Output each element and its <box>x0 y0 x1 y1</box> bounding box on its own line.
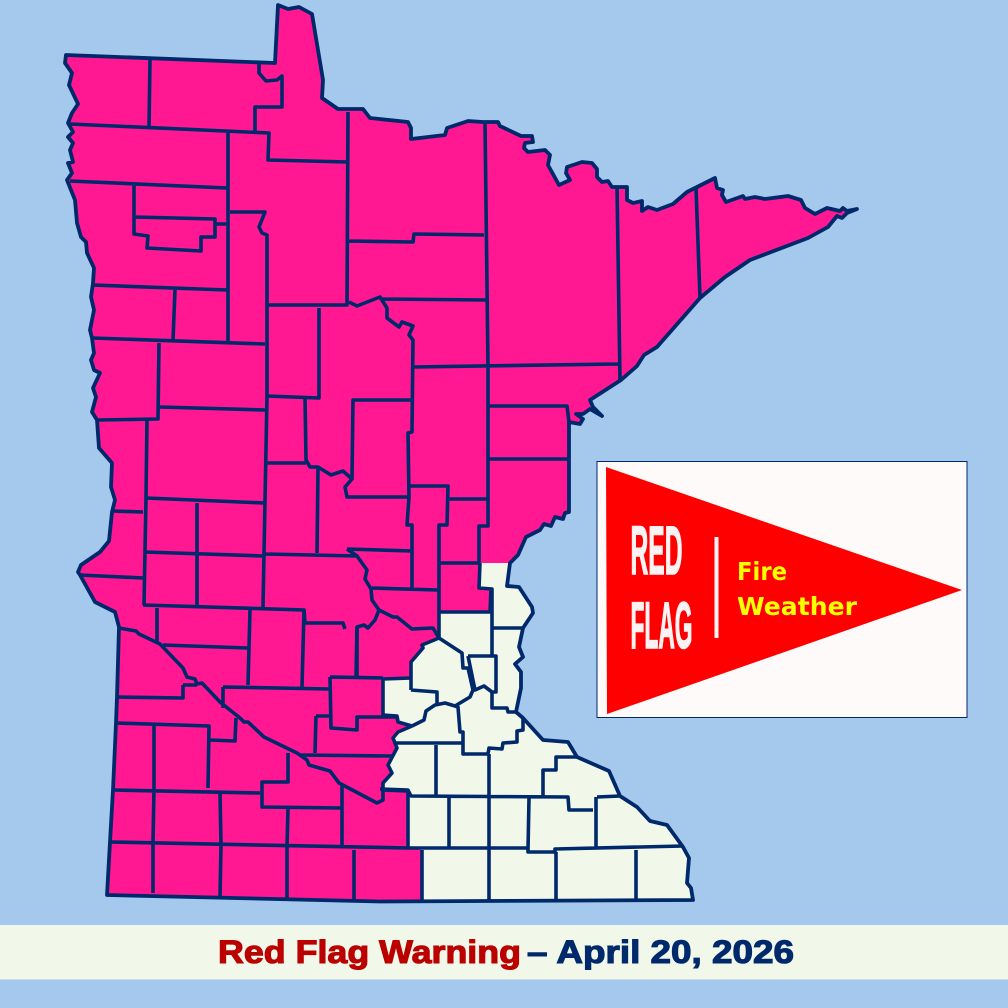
title text <box>218 934 794 970</box>
panel background <box>597 462 967 718</box>
red flag logo panel: RED <box>630 512 682 589</box>
county boundaries: south west <box>110 608 412 900</box>
divider bar <box>714 537 718 638</box>
title text: – April 20, 2026 <box>527 934 794 970</box>
red flag logo panel: FLAG <box>630 588 692 662</box>
title text: Red Flag Warning <box>218 934 521 970</box>
county boundaries: north <box>70 60 700 563</box>
map of Minnesota counties <box>65 5 857 902</box>
Fire Weather text: Weather <box>737 592 858 621</box>
county boundaries: south east <box>380 563 683 900</box>
counties not under warning <box>383 563 693 901</box>
red flag logo panel <box>597 462 967 718</box>
red pennant <box>606 467 962 714</box>
title banner <box>0 925 1008 980</box>
state outline <box>65 5 857 902</box>
Fire Weather text: Fire <box>737 557 787 586</box>
county boundaries: central <box>80 396 488 677</box>
Fire Weather text <box>737 557 858 621</box>
state area under warning <box>65 5 857 902</box>
RED FLAG wordmark <box>630 512 692 662</box>
